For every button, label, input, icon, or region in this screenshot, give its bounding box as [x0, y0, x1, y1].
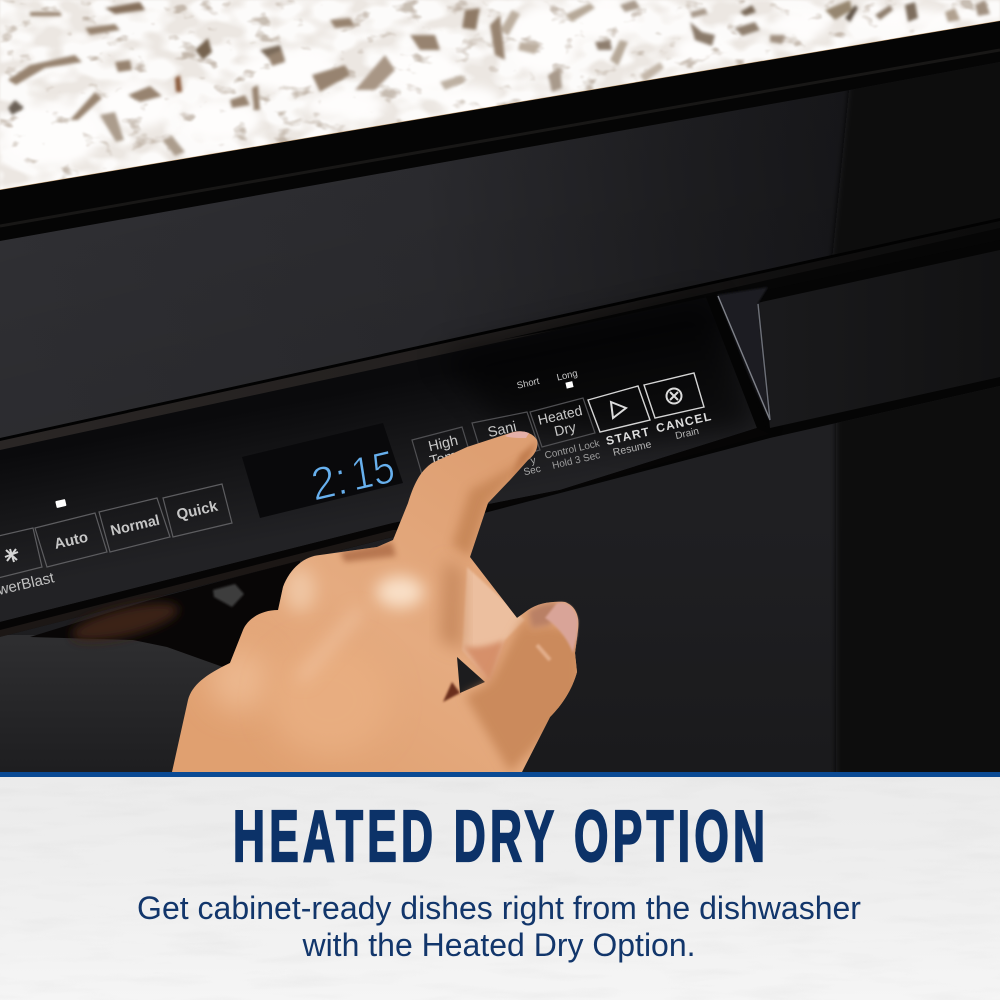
upper door right shaded side: [832, 62, 1000, 255]
button: Normal: [99, 498, 170, 552]
button: Sani: [472, 412, 542, 478]
button: Heated Dry: [530, 398, 595, 447]
button: Cancel: CANCEL: [655, 409, 713, 435]
button: Quick: Quick: [175, 498, 220, 524]
description text: Get cabinet-ready dishes right from the dishwasher: [137, 890, 861, 926]
lower door dark right side: [836, 380, 1000, 800]
caption background: [0, 777, 1000, 1000]
caption panel: [0, 772, 1000, 1000]
button: High Temp: [412, 427, 475, 485]
panel bottom lip: [0, 428, 770, 637]
control panel: [0, 368, 713, 603]
button: High Temp: Temp: [428, 446, 466, 470]
fingernail: thumb: [545, 603, 578, 653]
button: Normal: Normal: [109, 513, 161, 539]
tendon highlight: [300, 610, 360, 680]
digital display: 2:: [307, 451, 351, 511]
digital display: 15: [348, 441, 398, 502]
curled finger: [462, 567, 525, 682]
heading: HEATED DRY OPTION: [233, 796, 765, 877]
button: Start: START: [604, 424, 652, 448]
accent rule: [0, 772, 1000, 777]
shadow beside curled finger: [440, 560, 462, 650]
knuckle highlights: [376, 576, 424, 608]
button: Sani: Sani: [486, 419, 518, 441]
photo: granite countertop: [0, 0, 1000, 195]
description text: with the Heated Dry Option.: [301, 927, 696, 963]
photo: hand pressing button: [160, 425, 590, 775]
label: Control Lock: Hold 3 Sec: [551, 450, 601, 472]
top shadow on hand: [340, 542, 396, 562]
label: Short: Short: [516, 376, 541, 392]
button: Auto: Auto: [53, 529, 90, 553]
label: Control Lock: Control Lock: [544, 438, 602, 462]
button: Sani: Sec: [523, 464, 542, 478]
label: Control Lock: [544, 438, 602, 472]
upper door panel: [0, 62, 1000, 439]
reflection glint: [213, 584, 244, 607]
button: Cancel: Drain: [674, 426, 700, 442]
thumb shading: [465, 612, 582, 772]
description text: [137, 890, 861, 963]
pointing finger shading: [450, 466, 520, 556]
button: Cancel: [644, 373, 713, 442]
gap between fingers: [457, 657, 485, 693]
indicator light: Long: [565, 381, 574, 389]
door gap highlight: [706, 295, 766, 428]
hinge trim: [717, 287, 770, 422]
fingernail: index: [505, 431, 529, 438]
right handle section: [757, 250, 1000, 428]
label: Long: Long: [556, 368, 579, 384]
button: Sani: y: [530, 455, 537, 467]
control panel strip: [0, 297, 757, 622]
caption texture: [0, 777, 1000, 1000]
lower door left sheen: [0, 635, 222, 730]
button: Heated Dry: Dry: [553, 419, 577, 439]
panel right-hand shading: [440, 297, 757, 440]
lower door reflection: [30, 560, 300, 667]
lower door: [0, 386, 1000, 772]
photo: black dishwasher body: [0, 21, 1000, 772]
brown reflection tint: [68, 595, 182, 649]
button: Heated Dry: Heated: [536, 402, 584, 428]
button: Auto: [35, 513, 107, 567]
button: Start: [588, 386, 653, 459]
button: High Temp: High: [427, 433, 460, 455]
indicator light: Auto: [55, 499, 67, 508]
button: Quick: [163, 484, 232, 537]
button: PowerBlast: [0, 528, 57, 603]
digital display: [242, 423, 403, 518]
handle edge: [0, 218, 1000, 442]
button: Start: Resume: [612, 438, 653, 459]
